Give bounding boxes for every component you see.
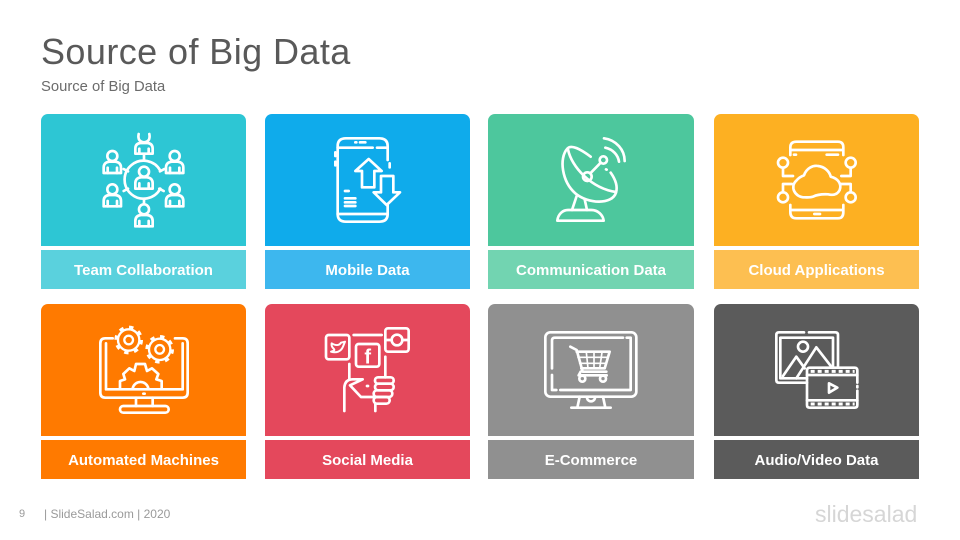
label bbox=[488, 250, 694, 289]
facebook f: f bbox=[364, 346, 371, 368]
label bbox=[41, 440, 246, 479]
label bbox=[488, 440, 694, 479]
label bbox=[714, 250, 919, 289]
label: Audio/Video Data bbox=[755, 452, 878, 469]
label: Communication Data bbox=[516, 262, 666, 279]
footer bbox=[19, 501, 917, 527]
icon: photo and film strip bbox=[775, 331, 859, 409]
header bbox=[41, 31, 351, 95]
icon: monitor with gears bbox=[99, 326, 189, 414]
title: Source of Big Data bbox=[41, 31, 351, 72]
panel: Team Collaboration bbox=[41, 114, 246, 289]
icon: cloud and devices bbox=[776, 140, 857, 220]
label: Team Collaboration bbox=[74, 262, 213, 279]
label: E-Commerce bbox=[545, 452, 637, 469]
page number: 9 bbox=[19, 508, 25, 520]
label: Social Media bbox=[322, 452, 413, 469]
panel: Cloud Applications bbox=[714, 114, 919, 289]
label: Mobile Data bbox=[325, 262, 410, 279]
panel: Mobile Data bbox=[265, 114, 470, 289]
panel: Communication Data bbox=[488, 114, 694, 289]
footer credit: | SlideSalad.com | 2020 bbox=[44, 507, 170, 521]
label: Automated Machines bbox=[68, 452, 219, 469]
icon: team network bbox=[102, 132, 185, 228]
panel: Audio/Video Data bbox=[714, 304, 919, 479]
label bbox=[41, 250, 246, 289]
icon: hand holding social apps bbox=[324, 327, 410, 412]
panel: Automated Machines bbox=[41, 304, 246, 479]
label bbox=[265, 250, 470, 289]
icon: satellite dish bbox=[556, 137, 626, 222]
panel: Social Media bbox=[265, 304, 470, 479]
panel: E-Commerce bbox=[488, 304, 694, 479]
icon: phone with arrows bbox=[334, 137, 402, 223]
brand logo: slidesalad bbox=[815, 501, 917, 527]
label bbox=[265, 440, 470, 479]
icon: monitor with shopping cart bbox=[544, 331, 638, 409]
label: Cloud Applications bbox=[748, 262, 885, 279]
subtitle: Source of Big Data bbox=[41, 79, 165, 95]
label bbox=[714, 440, 919, 479]
